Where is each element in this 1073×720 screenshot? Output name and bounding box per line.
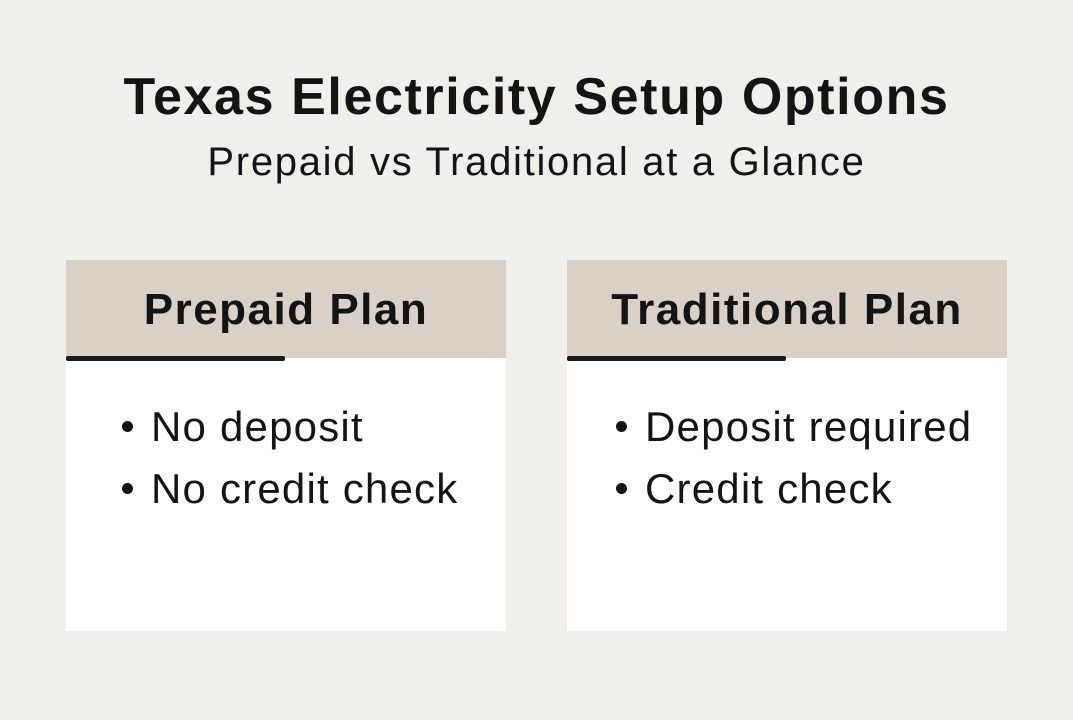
- bullet: credit check: Credit check: [645, 465, 893, 512]
- underline accent: [567, 356, 786, 361]
- bullet: no credit check: No credit check: [151, 465, 458, 512]
- underline accent: [66, 356, 285, 361]
- header: prepaid: [66, 260, 506, 358]
- header: traditional: Traditional Plan: [611, 285, 963, 334]
- subtitle: Prepaid vs Traditional at a Glance: [207, 140, 866, 184]
- bullet: no deposit: No deposit: [151, 403, 364, 450]
- bullet: deposit required: Deposit required: [645, 403, 972, 450]
- title: Texas Electricity Setup Options: [124, 68, 949, 126]
- panel: prepaid: [66, 260, 506, 631]
- header: prepaid: Prepaid Plan: [144, 285, 428, 334]
- panel: traditional: [567, 260, 1007, 631]
- header: traditional: [567, 260, 1007, 358]
